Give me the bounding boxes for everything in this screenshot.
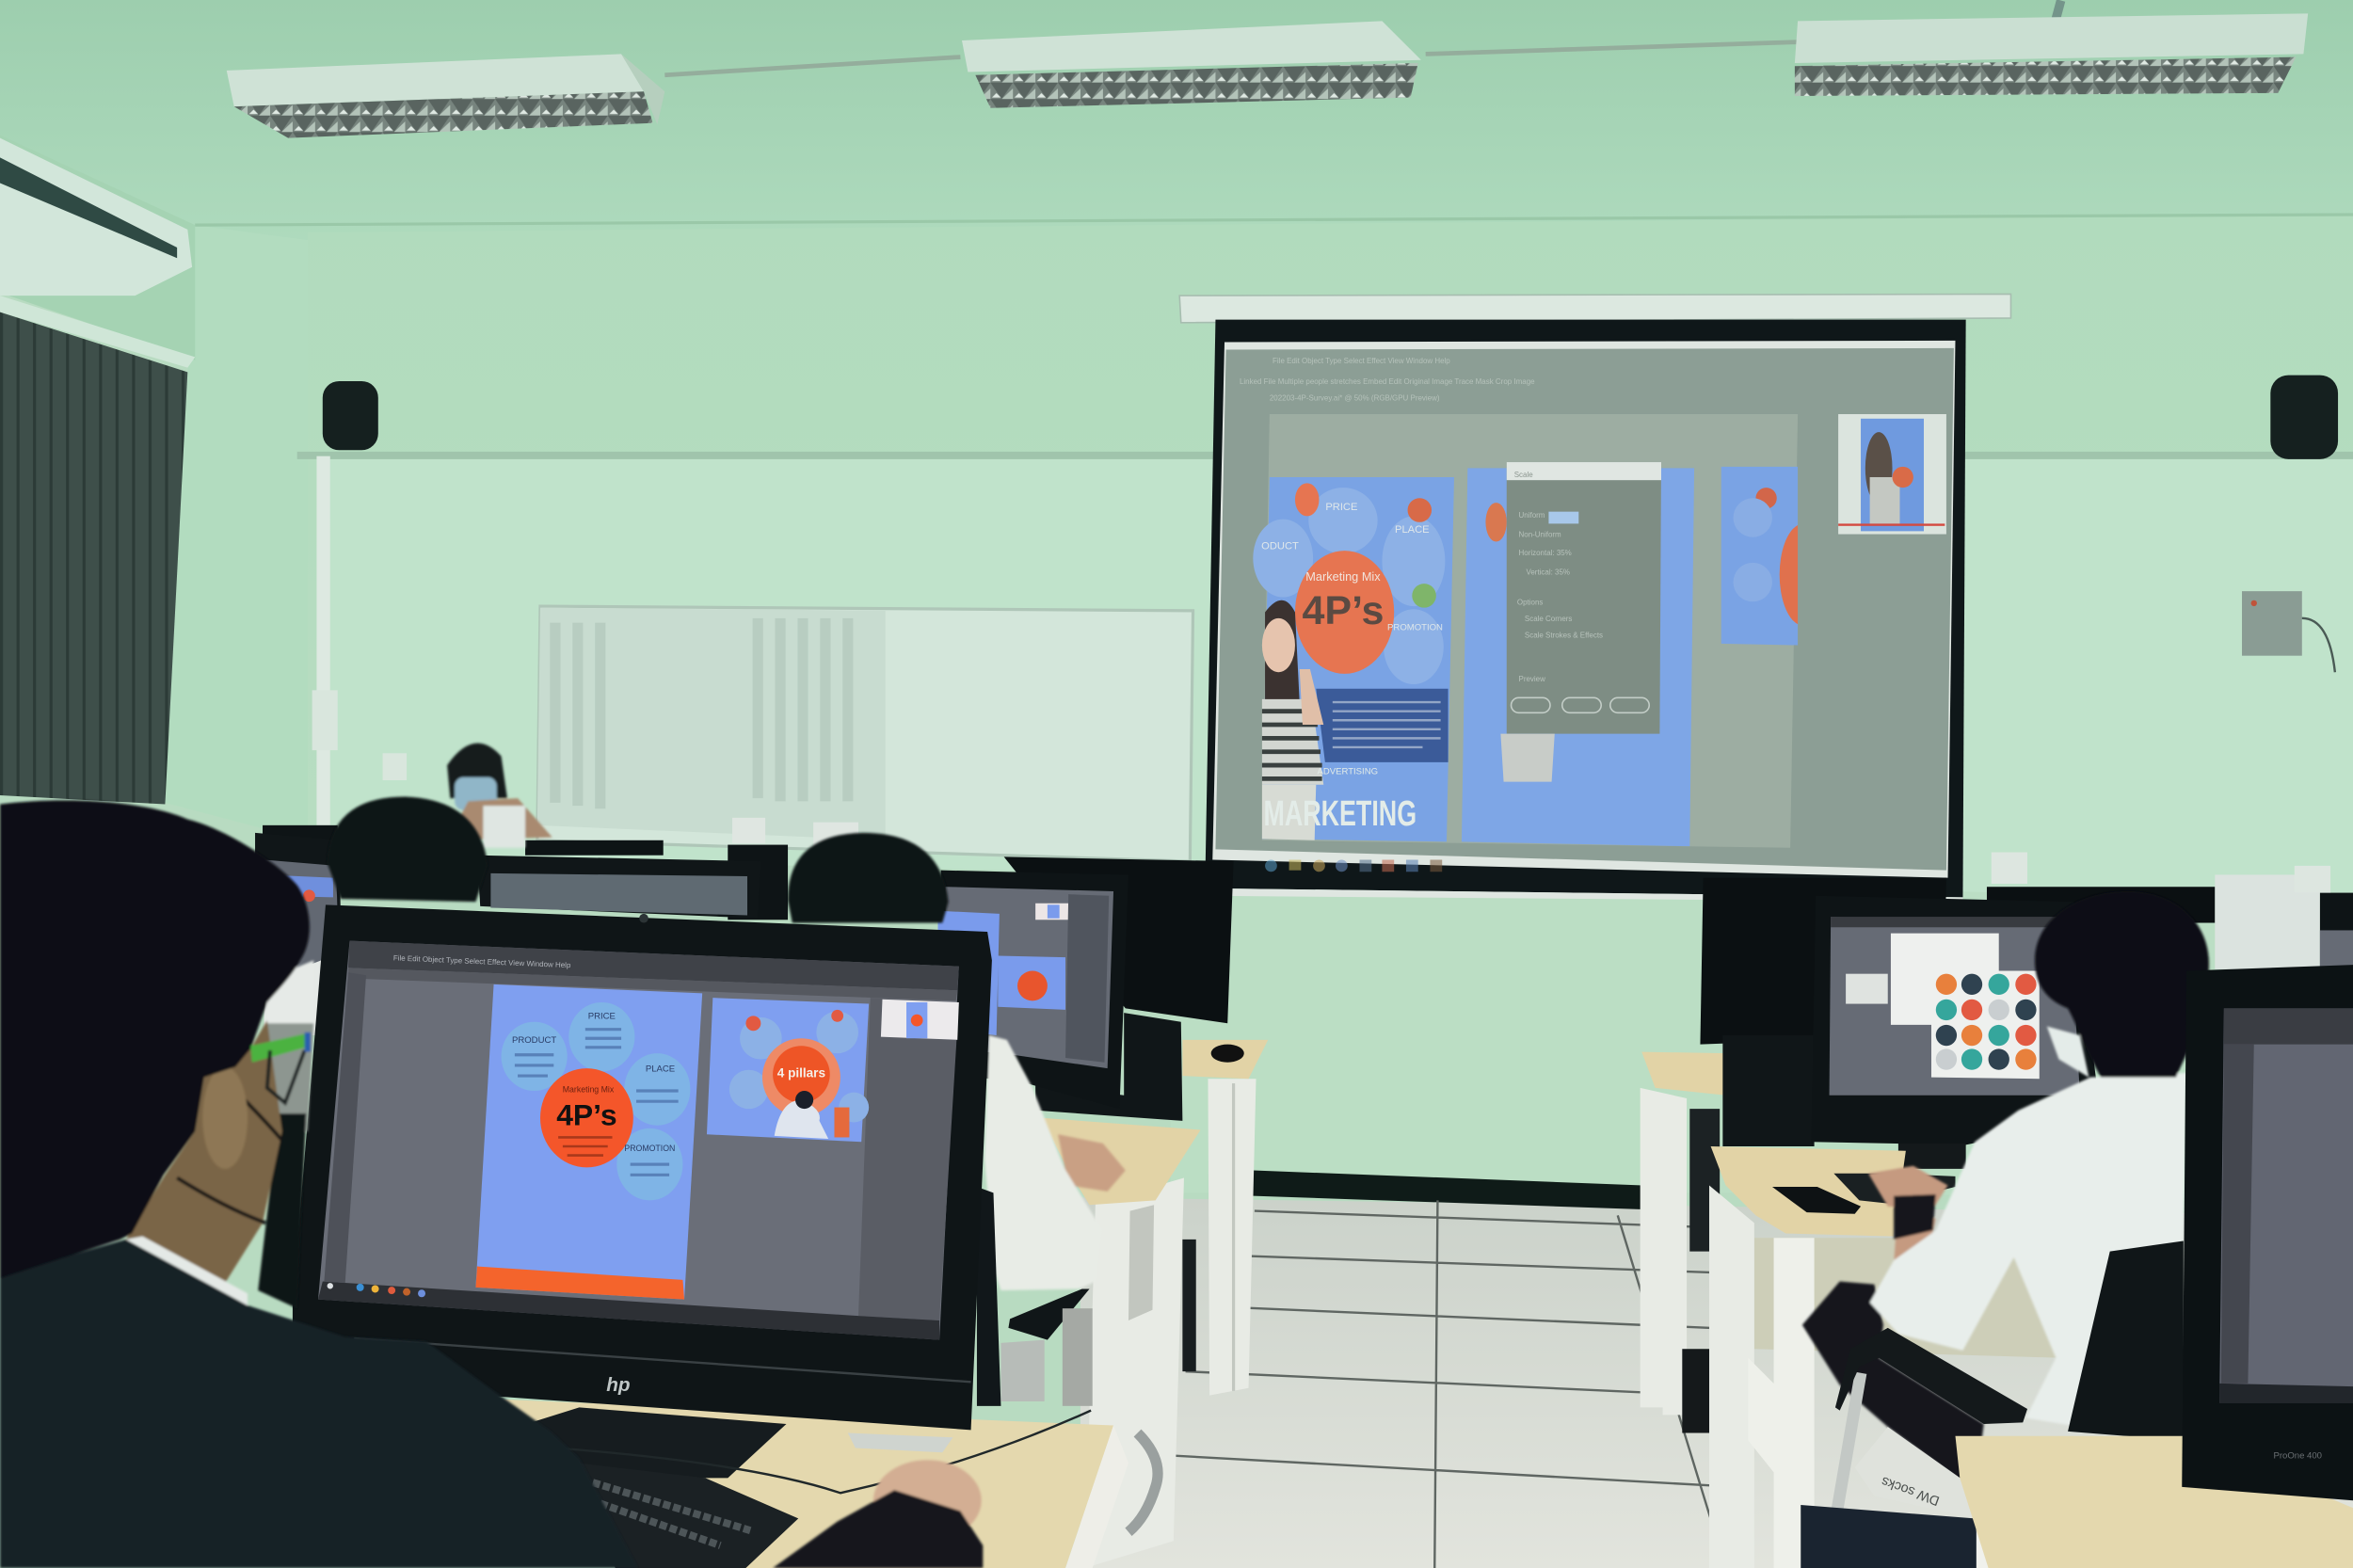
- monitor: far right: ProOne 400: [2273, 1451, 2322, 1462]
- projected poster left: ODUCT: [1261, 540, 1299, 552]
- wall box right of screen: [2242, 591, 2335, 672]
- icon grid: [1936, 974, 2037, 1070]
- main artboard: 4P's poster: PRICE: [588, 1012, 616, 1022]
- projected poster left: PRICE: [1325, 502, 1357, 513]
- projected toolbar: [1240, 357, 1535, 403]
- desk behind right: row three: [1641, 853, 2353, 1433]
- desk bottom right: [1955, 1436, 2353, 1568]
- main navigator thumbnail: [881, 1000, 959, 1040]
- front desk: [480, 1399, 1128, 1568]
- projected toolbar: Linked File Multiple people stretches Embed Edit Original Image Trace Mask Crop Image: [1240, 377, 1535, 386]
- main artboard: 4P's poster: Marketing Mix: [563, 1085, 615, 1095]
- projected poster left: PLACE: [1395, 524, 1430, 536]
- projected poster middle with scale dialog: Uniform: [1519, 511, 1545, 520]
- speakers: [323, 376, 2338, 459]
- projected poster middle with scale dialog: Non-Uniform: [1519, 531, 1561, 539]
- desk row two: [1042, 1118, 1201, 1568]
- main monitor app bars: File Edit Object Type Select Effect View Window Help: [393, 953, 571, 969]
- chair behind right student: [1722, 1035, 1815, 1146]
- face: [126, 1020, 282, 1283]
- desk row two right: [1709, 1146, 2063, 1568]
- projected poster middle with scale dialog: Scale Strokes & Effects: [1525, 632, 1603, 640]
- main monitor: [293, 904, 992, 1478]
- desk row three: [1182, 1040, 1268, 1396]
- projector screen housing: [1179, 294, 2010, 323]
- projected poster middle with scale dialog: Scale Corners: [1525, 615, 1572, 623]
- back row monitors, left: [263, 818, 858, 920]
- main artboard: 4P's poster: PRODUCT: [512, 1035, 556, 1046]
- projected poster left: PROMOTION: [1387, 623, 1443, 633]
- teacher: [447, 744, 552, 848]
- hand and sleeve: [873, 1460, 982, 1541]
- main monitor app bars: [318, 941, 959, 1340]
- projector screen: [1205, 320, 1966, 902]
- ceiling lights: [227, 13, 2308, 138]
- projected poster middle with scale dialog: Preview: [1519, 675, 1545, 683]
- ceiling: [0, 0, 2353, 240]
- projected canvas: [1262, 414, 1798, 848]
- projected poster middle with scale dialog: [1462, 462, 1694, 846]
- student 2 head: [328, 797, 488, 902]
- collar: [126, 1237, 248, 1305]
- whiteboard: [312, 606, 1193, 861]
- projected toolbar: File Edit Object Type Select Effect View Window Help: [1273, 357, 1450, 365]
- main artboard: 4 pillars poster: [707, 998, 869, 1142]
- chair behind student three: [1035, 1013, 1182, 1121]
- lower wall panel with trim rail: [297, 452, 2353, 901]
- projected poster left: Marketing Mix: [1305, 569, 1381, 584]
- ear: [202, 1067, 248, 1169]
- foreground student: [0, 800, 983, 1568]
- front chair with chrome arm: [977, 1187, 1093, 1406]
- projected poster middle with scale dialog: Scale: [1514, 471, 1533, 479]
- main artboard: 4 pillars poster: 4 pillars: [777, 1066, 825, 1080]
- main artboard: 4P's poster: PROMOTION: [624, 1144, 675, 1153]
- floor with baseboard: [1080, 1171, 2353, 1568]
- projected poster left: [1253, 477, 1454, 841]
- projected toolbar: 202203-4P-Survey.ai* @ 50% (RGB/GPU Preview): [1270, 394, 1440, 403]
- main artboard: 4P's poster: [475, 984, 702, 1300]
- projected taskbar: [1265, 860, 1442, 872]
- projected poster left: 4P’s: [1303, 588, 1384, 633]
- keyboard and cable: [555, 1411, 1091, 1568]
- projected poster left: ADVERTISING: [1317, 767, 1378, 777]
- projected poster middle with scale dialog: Vertical: 35%: [1526, 568, 1570, 577]
- main artboard: 4P's poster: 4P’s: [556, 1098, 617, 1132]
- monitor: right middle with icon sheet: [1811, 896, 2101, 1169]
- monitors: left middle row: [255, 833, 760, 1035]
- jacket: [0, 1240, 638, 1568]
- projected poster left: MARKETING: [1263, 793, 1417, 834]
- office chair right: DW socks: [1880, 1473, 1942, 1508]
- keyboard: [1833, 1174, 1955, 1204]
- hair: [0, 800, 310, 1278]
- projected poster middle with scale dialog: Options: [1517, 598, 1543, 606]
- student 3: [788, 833, 1126, 1290]
- window blinds: [0, 296, 195, 805]
- projected poster right: [1721, 467, 1798, 646]
- monitor: far right: [2182, 965, 2353, 1500]
- background shirt and glasses area: [267, 960, 313, 1023]
- student on the right: [1802, 891, 2209, 1492]
- back row monitor beside screen: [1004, 856, 1234, 1023]
- projected navigator: [1838, 414, 1946, 535]
- monitor: student 3 screen: [937, 871, 1128, 1109]
- office chair right: [1801, 1240, 2184, 1568]
- main monitor logo: hp: [606, 1374, 631, 1396]
- projected poster middle with scale dialog: Horizontal: 35%: [1519, 549, 1572, 557]
- back wall: [0, 135, 2353, 1200]
- main taskbar icons: [328, 1283, 425, 1297]
- glasses: [250, 1033, 306, 1063]
- phone: [1772, 1187, 1861, 1214]
- air conditioner: [0, 138, 192, 296]
- main artboard: 4P's poster: PLACE: [646, 1064, 675, 1074]
